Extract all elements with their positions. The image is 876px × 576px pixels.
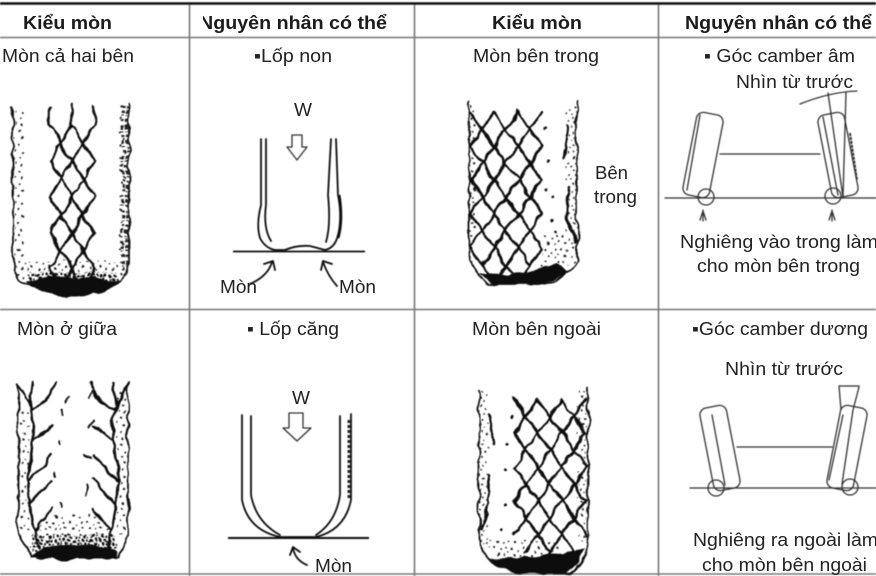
label: front view: Nhìn từ trước xyxy=(736,72,853,92)
wear label: Mòn xyxy=(315,556,352,576)
side label: inner xyxy=(594,163,637,207)
label: over-inflated: ▪ Lốp căng xyxy=(247,319,339,339)
arrow: wear xyxy=(290,547,307,565)
header: wear type 2: Kiểu mòn xyxy=(492,13,582,33)
side label: inner: Bên xyxy=(595,163,628,183)
header: possible cause 1: Nguyên nhân có thể xyxy=(199,13,387,33)
diagram: positive camber wheels xyxy=(690,386,876,496)
diagram: over-inflated tire xyxy=(228,413,369,565)
caption: positive camber: Nghiêng ra ngoài làm xyxy=(693,530,876,550)
panel: under-inflated tire xyxy=(220,46,376,297)
label: center wear: Mòn ở giữa xyxy=(17,319,118,339)
panel: center wear xyxy=(17,319,128,559)
arrow: left contact xyxy=(700,210,706,221)
label: front view: Nhìn từ trước xyxy=(725,359,843,379)
diagram: negative camber wheels xyxy=(665,91,876,221)
diagram: under-inflated tire xyxy=(233,135,365,286)
tire: both-edge wear xyxy=(13,103,129,296)
label: outer wear: Mòn bên ngoài xyxy=(472,319,601,339)
arrow: load xyxy=(287,135,307,160)
arrow: right wear xyxy=(321,261,337,286)
label: both sides: Mòn cả hai bên xyxy=(2,46,134,66)
load label: W xyxy=(292,388,310,408)
panel: inner wear xyxy=(469,46,637,284)
label: negative camber: ▪ Góc camber âm xyxy=(704,46,855,66)
panel: outer wear xyxy=(472,319,601,573)
caption: negative camber: cho mòn bên trong xyxy=(697,256,860,276)
load label: W xyxy=(294,100,312,120)
left wear label: Mòn xyxy=(220,277,257,297)
caption: positive camber xyxy=(693,530,876,575)
arrow: load xyxy=(283,413,311,441)
header: possible cause 2: Nguyên nhân có thể xyxy=(685,13,872,33)
tire: center wear xyxy=(18,383,128,559)
tire: inner-edge wear xyxy=(469,100,577,284)
caption: negative camber: Nghiêng vào trong làm xyxy=(680,232,876,252)
panel: over-inflated tire xyxy=(228,319,369,576)
panel: negative camber xyxy=(665,46,876,276)
panel: wear on both sides xyxy=(2,46,134,296)
label: under-inflated: ▪Lốp non xyxy=(254,46,332,66)
caption: negative camber xyxy=(680,232,876,276)
table header row xyxy=(23,13,872,33)
arrow: left wear xyxy=(250,261,275,284)
side label: inner: trong xyxy=(594,187,637,207)
panel: positive camber xyxy=(690,319,876,575)
caption: positive camber: cho mòn bên ngoài xyxy=(702,555,867,575)
right wear label: Mòn xyxy=(339,277,376,297)
label: positive camber: ▪Góc camber dương xyxy=(692,319,868,339)
header: wear type 1: Kiểu mòn xyxy=(23,13,112,33)
arrow: right contact xyxy=(829,210,835,221)
label: inner wear: Mòn bên trong xyxy=(473,46,599,66)
tire: outer-edge wear xyxy=(479,388,588,573)
